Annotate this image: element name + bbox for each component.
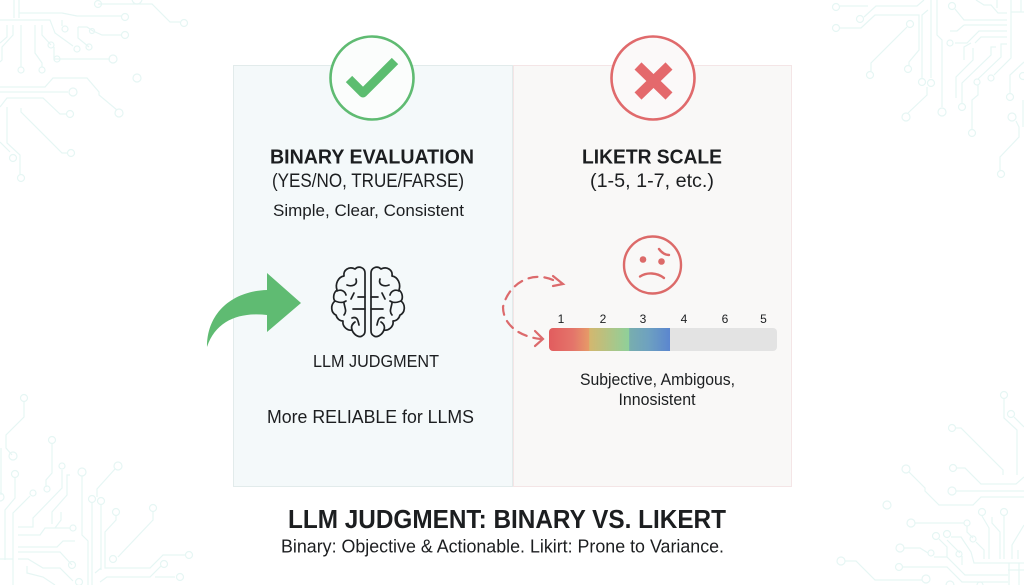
- panel: binary evaluation: [234, 36, 512, 486]
- arrow: green curved: [207, 273, 301, 347]
- icon: brain: [332, 267, 404, 337]
- subheading: scale ranges: (1-5, 1-7, etc.): [590, 171, 714, 192]
- icon: green check in circle: [330, 36, 414, 120]
- scale numbers: [558, 312, 767, 326]
- subtitle: Binary: Objective & Actionable. Likirt: Prone to Variance.: [281, 536, 724, 556]
- heading: binary evaluation: BINARY EVALUATION: [270, 146, 474, 168]
- subheading: yes/no: (YES/NO, TRUE/FARSE): [272, 171, 464, 192]
- text: inconsistent: Innosistent: [618, 391, 696, 409]
- scale numbers: 2: [600, 312, 607, 326]
- scale numbers: 6: [722, 312, 729, 326]
- icon: red cross in circle: [612, 36, 694, 120]
- panel: likert scale: [514, 36, 792, 486]
- title: LLM JUDGMENT: BINARY VS. LIKERT: [288, 504, 726, 534]
- scale numbers: 3: [640, 312, 647, 326]
- panel background: binary: [234, 66, 512, 486]
- icon: worried face: [624, 236, 681, 294]
- panel background: likert: [514, 66, 792, 486]
- arrow: red dashed loop: [503, 276, 563, 346]
- text: simple, clear, consistent: Simple, Clear, Consistent: [273, 201, 464, 220]
- scale bar: [549, 328, 777, 351]
- scale numbers: 1: [558, 312, 565, 326]
- scale numbers: 5: [760, 312, 767, 326]
- label: llm judgment: LLM JUDGMENT: [313, 351, 439, 371]
- heading: likert scale: LIKETR SCALE: [582, 146, 722, 168]
- text: subjective, ambiguous: Subjective, Ambigous,: [580, 371, 735, 389]
- text: more reliable: More RELIABLE for LLMS: [267, 406, 474, 427]
- scale numbers: 4: [681, 312, 688, 326]
